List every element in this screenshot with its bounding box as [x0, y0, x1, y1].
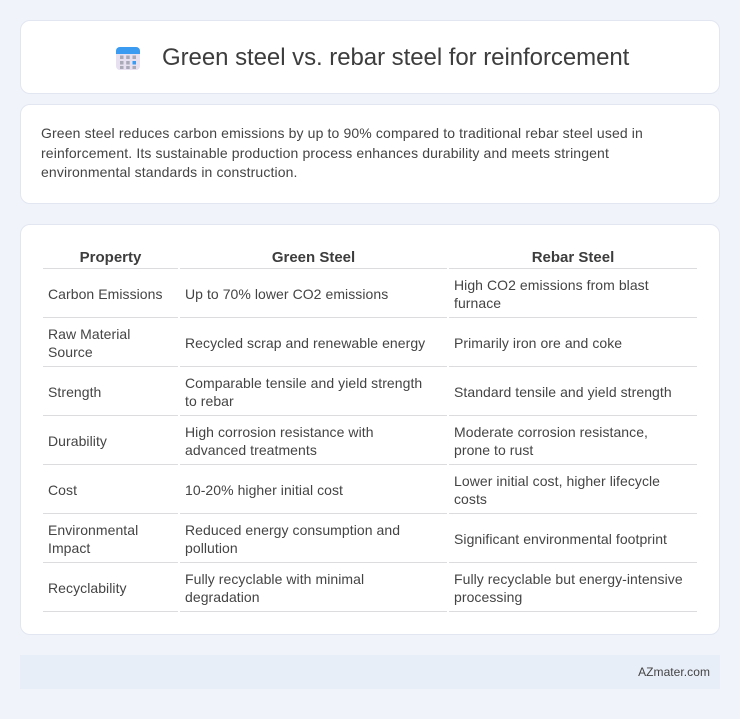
table: comparison: Reduced energy consumption and: [185, 522, 400, 538]
row: Recyclability: [48, 571, 683, 605]
table: comparison: Standard tensile and yield strength: [454, 384, 672, 400]
row: Durability: [48, 424, 648, 458]
table: comparison: Raw Material: [48, 326, 130, 342]
table: comparison: Moderate corrosion resistance,: [454, 424, 648, 440]
table: comparison: processing: [454, 589, 522, 605]
text: summary: Green steel reduces carbon emissions by up to 90% compared to traditional rebar steel used in: [41, 125, 643, 141]
row: Environmental Impact: [48, 522, 667, 556]
table: comparison: Impact: [48, 540, 90, 556]
row: Carbon Emissions: [48, 277, 649, 311]
footer bar: [20, 655, 720, 689]
table: comparison: Lower initial cost, higher lifecycle: [454, 473, 660, 489]
column header: Property: Property: [80, 249, 141, 266]
table: comparison: Recycled scrap and renewable energy: [185, 335, 425, 351]
text: summary: reinforcement. Its sustainable production process enhances durability and meets stringent: [41, 145, 609, 161]
table: comparison: Carbon Emissions: [48, 286, 163, 302]
table: comparison: Fully recyclable but energy-intensive: [454, 571, 683, 587]
table: comparison: prone to rust: [454, 442, 533, 458]
table: comparison: costs: [454, 491, 487, 507]
row: Strength: [48, 375, 672, 409]
panel: summary card: [20, 104, 720, 204]
text: summary: environmental standards in construction.: [41, 164, 298, 180]
column header: Green Steel: Green Steel: [272, 249, 355, 266]
panel: title card: [20, 20, 720, 94]
icon: calendar: [116, 47, 140, 70]
table: comparison: furnace: [454, 295, 501, 311]
table: comparison: High corrosion resistance with: [185, 424, 374, 440]
table: comparison: Recyclability: [48, 580, 127, 596]
table: comparison: advanced treatments: [185, 442, 317, 458]
table: comparison: degradation: [185, 589, 260, 605]
row: Cost: [48, 473, 660, 507]
row: Raw Material Source: [48, 326, 622, 360]
table: comparison: Durability: [48, 433, 107, 449]
table: comparison: Comparable tensile and yield strength: [185, 375, 422, 391]
table: comparison: 10-20% higher initial cost: [185, 482, 343, 498]
table: comparison: Up to 70% lower CO2 emissions: [185, 286, 388, 302]
title: Green steel vs. rebar steel for reinforcement: [162, 44, 629, 71]
column header: Rebar Steel: Rebar Steel: [532, 249, 614, 266]
table: comparison: Primarily iron ore and coke: [454, 335, 622, 351]
table: comparison: High CO2 emissions from blast: [454, 277, 649, 293]
table: comparison: Source: [48, 344, 93, 360]
table: comparison: Strength: [48, 384, 101, 400]
table: comparison: pollution: [185, 540, 238, 556]
table: comparison: Fully recyclable with minimal: [185, 571, 364, 587]
table: comparison: to rebar: [185, 393, 234, 409]
table: comparison: Significant environmental footprint: [454, 531, 667, 547]
footer text: AZmater.com: [638, 665, 710, 679]
panel: comparison table card: [20, 224, 720, 635]
table: comparison: Cost: [48, 482, 77, 498]
text: summary: [41, 125, 643, 180]
table: comparison: Environmental: [48, 522, 138, 538]
